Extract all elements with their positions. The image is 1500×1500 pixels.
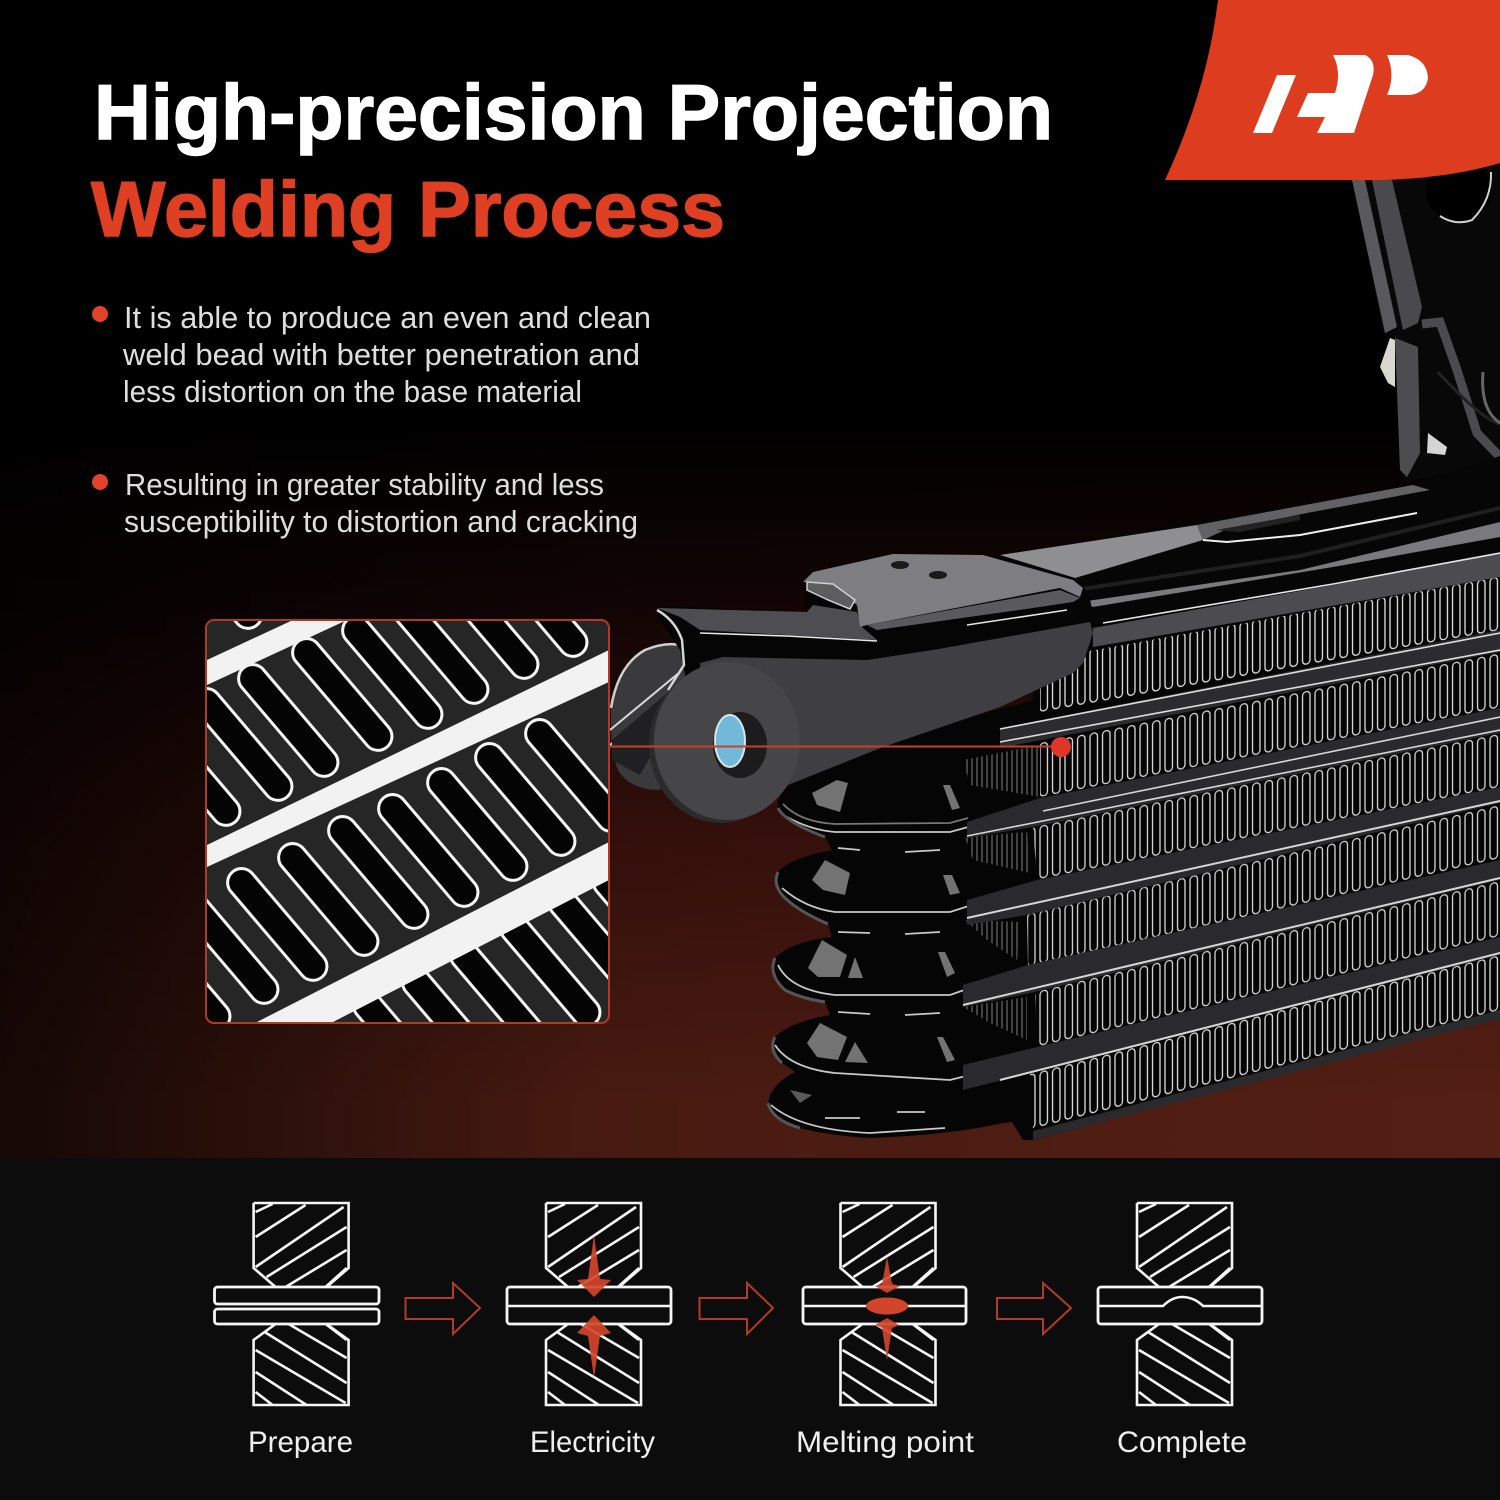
rear bushing [610,644,700,790]
bullet one: less distortion on the base material [123,374,582,409]
logo badge [1165,0,1500,180]
plate rim lines [771,804,972,1133]
fin rows [1027,577,1500,1130]
zoom inset: fin detail [205,619,610,1024]
dome highlights [807,780,960,1063]
product photo: transmission oil cooler [610,158,1500,1140]
bullet one: It is able to produce an even and clean [124,300,651,335]
arrow three [997,1283,1071,1334]
step: melting point [796,1203,975,1459]
title: Welding Process [91,165,725,253]
bullet one [92,300,651,409]
callout line and dot [610,737,1071,757]
stacked end plates [768,700,1035,1140]
step: complete: Complete [1117,1426,1247,1459]
bullet two [92,467,638,539]
top rail [1000,456,1500,650]
bullet two: susceptibility to distortion and cracking [124,504,638,539]
arrow two [700,1283,773,1334]
background [0,0,1500,1160]
title: High-precision Projection [94,68,1053,156]
title [91,68,1053,253]
step: electricity: Electricity [530,1426,655,1459]
front bushing [649,662,800,823]
bullet list [92,300,651,539]
bullet two: Resulting in greater stability and less [125,467,604,502]
rails between fin rows [963,630,1500,1140]
rear fins [963,745,1040,1040]
cooler core [963,456,1500,1140]
step: electricity [507,1203,671,1459]
step: prepare: Prepare [248,1426,353,1459]
icon: logo mark [1253,55,1428,133]
step: melting point: Melting point [796,1426,975,1459]
step: prepare [214,1203,379,1459]
panel: welding steps [0,1158,1500,1500]
arrow one [406,1283,480,1334]
plate outer edge shading [768,808,828,1128]
front arm [655,553,1093,800]
bullet one: weld bead with better penetration and [122,337,640,372]
upper mounting bracket [1352,158,1500,482]
step: complete [1098,1203,1262,1459]
